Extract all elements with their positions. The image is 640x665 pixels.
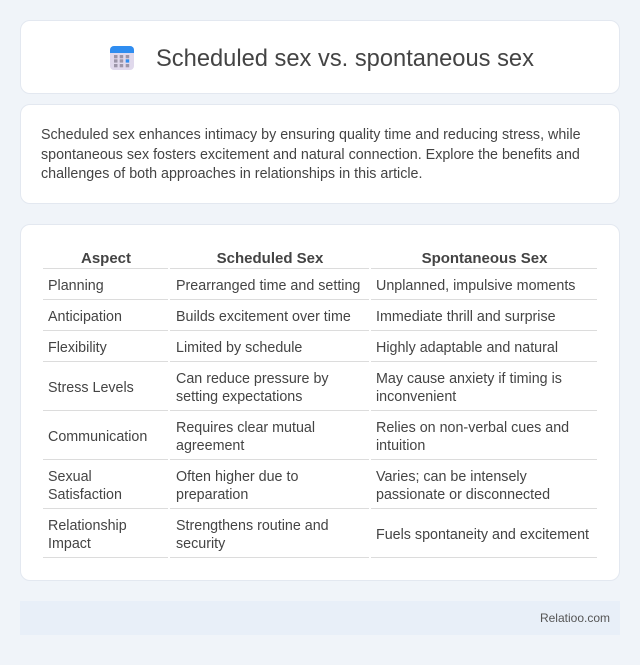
title: Scheduled sex vs. spontaneous sex [156,46,534,72]
panel: comparison table: Limited by schedule [176,340,302,356]
panel: comparison table: Prearranged time and setting [176,278,360,294]
row: Sexual Satisfaction [48,469,122,503]
intro text: spontaneous sex fosters excitement and natural connection. Explore the benefits and [41,146,580,162]
row: Anticipation: Anticipation [48,309,122,325]
table header: Aspect: Aspect [81,250,131,267]
panel: comparison table: Strengthens routine and [176,518,329,534]
panel: comparison table: preparation [176,487,248,503]
panel: comparison table: passionate or disconnected [376,487,550,503]
panel: comparison table [20,224,620,581]
panel: comparison table: security [176,536,225,552]
footer credit: Relatioo.com [540,611,610,625]
panel: comparison table: Highly adaptable and natural [376,340,558,356]
panel: title header [20,20,620,94]
table header: Spontaneous Sex: Spontaneous Sex [422,250,547,267]
panel: comparison table: Builds excitement over time [176,309,351,325]
row: Planning: Planning [48,278,104,294]
panel: comparison table: intuition [376,438,425,454]
panel: comparison table: May cause anxiety if timing is [376,371,562,387]
panel: comparison table: Varies; can be intensely [376,469,527,485]
panel: comparison table: setting expectations [176,389,302,405]
panel: introduction [20,104,620,204]
panel: comparison table: Can reduce pressure by [176,371,329,387]
row: Relationship Impact: Relationship [48,518,127,534]
intro text [41,127,581,182]
intro text: Scheduled sex enhances intimacy by ensuring quality time and reducing stress, while [41,127,581,143]
row: Relationship Impact: Impact [48,536,91,552]
table header: Scheduled Sex: Scheduled Sex [217,250,323,267]
panel: comparison table: Unplanned, impulsive moments [376,278,575,294]
panel: comparison table: Relies on non-verbal cues and [376,420,569,436]
panel: comparison table: inconvenient [376,389,456,405]
panel: comparison table: Often higher due to [176,469,298,485]
row: Flexibility: Flexibility [48,340,107,356]
row: Sexual Satisfaction: Satisfaction [48,487,122,503]
intro text: challenges of both approaches in relationships in this article. [41,166,422,182]
row: Communication: Communication [48,429,147,445]
row: Sexual Satisfaction: Sexual [48,469,92,485]
panel: comparison table: Immediate thrill and surprise [376,309,556,325]
row: Relationship Impact [48,518,127,552]
panel: comparison table: Fuels spontaneity and excitement [376,527,589,543]
footer bar [20,601,620,635]
panel: comparison table: Requires clear mutual [176,420,315,436]
icon: calendar [110,46,134,70]
row: Stress Levels: Stress Levels [48,380,134,396]
panel: comparison table: agreement [176,438,244,454]
